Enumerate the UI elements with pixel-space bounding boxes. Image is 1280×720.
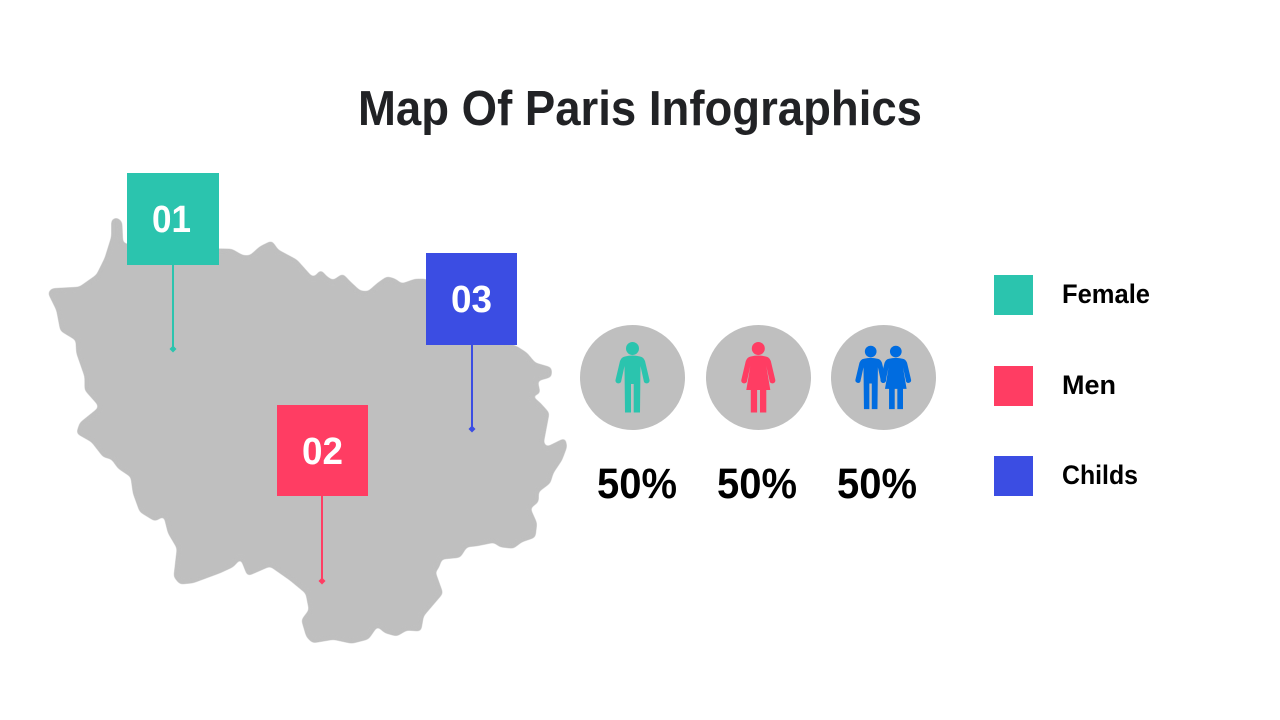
pin 03 bbox=[426, 253, 517, 432]
legend: female bbox=[994, 275, 1150, 315]
map of Paris region bbox=[48, 218, 567, 643]
percentage: woman: 50% bbox=[717, 460, 797, 508]
legend: men: Men bbox=[1062, 370, 1116, 400]
pin 01: 01 bbox=[152, 199, 191, 241]
icon: couple in circle bbox=[831, 325, 936, 430]
pin 03: 03 bbox=[451, 279, 492, 321]
title: Map Of Paris Infographics bbox=[358, 82, 922, 136]
icon: man in circle bbox=[580, 325, 685, 430]
pin 01 bbox=[127, 173, 219, 352]
legend: female: Female bbox=[1062, 279, 1150, 309]
legend: childs bbox=[994, 456, 1138, 496]
percentage: man: 50% bbox=[597, 460, 677, 508]
icon: woman in circle bbox=[706, 325, 811, 430]
pin 02 bbox=[277, 405, 368, 584]
pin 02: 02 bbox=[302, 431, 343, 473]
percentage: couple: 50% bbox=[837, 460, 917, 508]
legend: men bbox=[994, 366, 1116, 406]
legend: childs: Childs bbox=[1062, 460, 1138, 490]
